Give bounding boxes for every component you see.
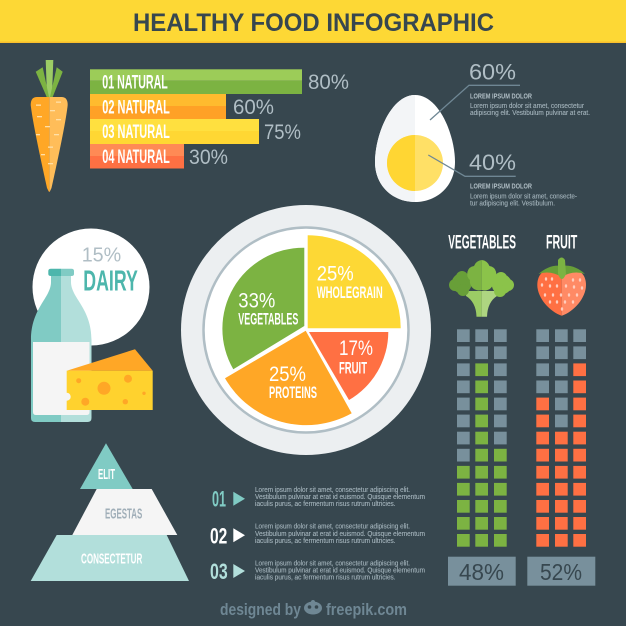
unit chart: vegetables 48% bbox=[448, 329, 516, 586]
bar 04: 30% bbox=[189, 146, 228, 169]
pyramid tier: consectetur: CONSECTETUR bbox=[81, 550, 142, 567]
list item 03: 03 bbox=[210, 559, 228, 584]
bar 02: 60% bbox=[233, 96, 274, 119]
slice: fruit: 17% bbox=[339, 337, 373, 360]
icon: milk bottle bbox=[31, 269, 92, 422]
footer credit: freepik.com bbox=[326, 600, 407, 619]
icon: cheese bbox=[63, 349, 153, 410]
footer credit: designed by bbox=[220, 600, 301, 619]
list item 02: Vestibulum pulvinar at erat id euismod. Quisque elementum bbox=[255, 531, 425, 538]
title banner: HEALTHY FOOD INFOGRAPHIC bbox=[133, 9, 494, 37]
pyramid tier: elit: ELIT bbox=[98, 466, 115, 483]
bar 03: 03 NATURAL bbox=[102, 121, 170, 143]
callout: egg yolk 40% bbox=[428, 150, 578, 207]
pyramid tier: consectetur bbox=[31, 535, 189, 581]
dairy circle label: DAIRY bbox=[83, 266, 138, 298]
bar 01: 80% bbox=[308, 71, 349, 94]
slice: wholegrain: 25% bbox=[317, 263, 354, 286]
slice: fruit bbox=[309, 332, 388, 400]
list item 01: iaculis purus, ac fermentum risus rutrum ultricies. bbox=[255, 501, 396, 508]
list item 02: iaculis purus, ac fermentum risus rutrum ultricies. bbox=[255, 538, 396, 545]
icon: broccoli bbox=[449, 260, 514, 317]
pyramid bbox=[31, 443, 189, 581]
callout: egg yolk 40%: tur adipiscing elit. Vestibulum. bbox=[470, 200, 555, 207]
footer credit bbox=[220, 600, 407, 619]
callout: egg white 60% bbox=[430, 59, 590, 120]
list item 02: Lorem ipsum dolor sit amet, consectetur adipiscing elit. bbox=[255, 524, 410, 531]
slice: vegetables: VEGETABLES bbox=[238, 310, 298, 328]
bar 03 bbox=[90, 119, 301, 144]
callout: egg white 60%: Lorem ipsum dolor sit amet, consectetur bbox=[470, 103, 585, 110]
list item 01: Lorem ipsum dolor sit amet, consectetur adipiscing elit. bbox=[255, 487, 410, 494]
list item 03: Lorem ipsum dolor sit amet, consectetur adipiscing elit. bbox=[255, 560, 410, 567]
list item 02 bbox=[210, 523, 425, 548]
callout: egg yolk 40%: 40% bbox=[469, 150, 516, 175]
list item 01 bbox=[212, 487, 425, 512]
value box: 48%: 48% bbox=[459, 559, 504, 585]
list item 01: Vestibulum pulvinar at erat id euismod. Quisque elementum bbox=[255, 494, 425, 501]
plate pie chart bbox=[181, 205, 431, 455]
icon: strawberry bbox=[537, 258, 586, 316]
callout: egg yolk 40%: LOREM IPSUM DOLOR bbox=[470, 184, 532, 191]
slice: proteins bbox=[225, 331, 352, 425]
slice: proteins: 25% bbox=[269, 363, 306, 386]
slice: fruit: FRUIT bbox=[339, 359, 367, 377]
slice: vegetables: 33% bbox=[238, 289, 275, 312]
pyramid tier: egestas bbox=[72, 489, 177, 535]
bar 03: 75% bbox=[264, 121, 301, 144]
list item 02: 02 bbox=[210, 523, 227, 548]
callout: egg yolk 40%: Lorem ipsum dolor sit amet, consecte- bbox=[470, 193, 578, 200]
title banner bbox=[0, 0, 626, 43]
dairy circle label: 15% bbox=[82, 245, 121, 267]
icon: freepik logo bbox=[304, 600, 322, 614]
plate bbox=[181, 205, 431, 455]
icon: egg bbox=[375, 95, 455, 202]
list item 03: Vestibulum pulvinar at erat id euismod. Quisque elementum bbox=[255, 567, 425, 574]
value box: 52%: 52% bbox=[540, 559, 582, 585]
value box: 52% bbox=[527, 557, 595, 586]
dairy circle label bbox=[32, 228, 150, 346]
callout: egg white 60%: 60% bbox=[469, 59, 516, 84]
list item 03: iaculis purus, ac fermentum risus rutrum ultricies. bbox=[255, 574, 396, 581]
value box: 48% bbox=[448, 557, 516, 586]
heading: vegetables: VEGETABLES bbox=[448, 231, 516, 253]
callout: egg white 60%: LOREM IPSUM DOLOR bbox=[470, 94, 532, 101]
slice: vegetables bbox=[222, 248, 304, 369]
unit chart: fruit 52% bbox=[527, 329, 595, 586]
pyramid tier: elit bbox=[80, 443, 133, 489]
slice: wholegrain: WHOLEGRAIN bbox=[317, 284, 383, 302]
slice: wholegrain bbox=[308, 235, 401, 328]
bar 02: 02 NATURAL bbox=[102, 96, 170, 118]
panel: dairy bbox=[31, 228, 153, 422]
list item 03 bbox=[210, 559, 425, 584]
heading: fruit: FRUIT bbox=[546, 231, 577, 253]
bar 01 bbox=[90, 69, 349, 94]
list item 01: 01 bbox=[212, 487, 226, 512]
bar 02 bbox=[90, 94, 274, 119]
bar chart: natural bbox=[90, 69, 349, 169]
pyramid tier: egestas: EGESTAS bbox=[105, 505, 142, 522]
bar 01: 01 NATURAL bbox=[102, 72, 168, 94]
bar 04: 04 NATURAL bbox=[102, 146, 170, 168]
callout: egg white 60%: adipiscing elit. Vestibulum pulvinar at erat. bbox=[470, 110, 590, 117]
slice: proteins: PROTEINS bbox=[269, 384, 317, 402]
icon: carrot bbox=[31, 60, 68, 192]
